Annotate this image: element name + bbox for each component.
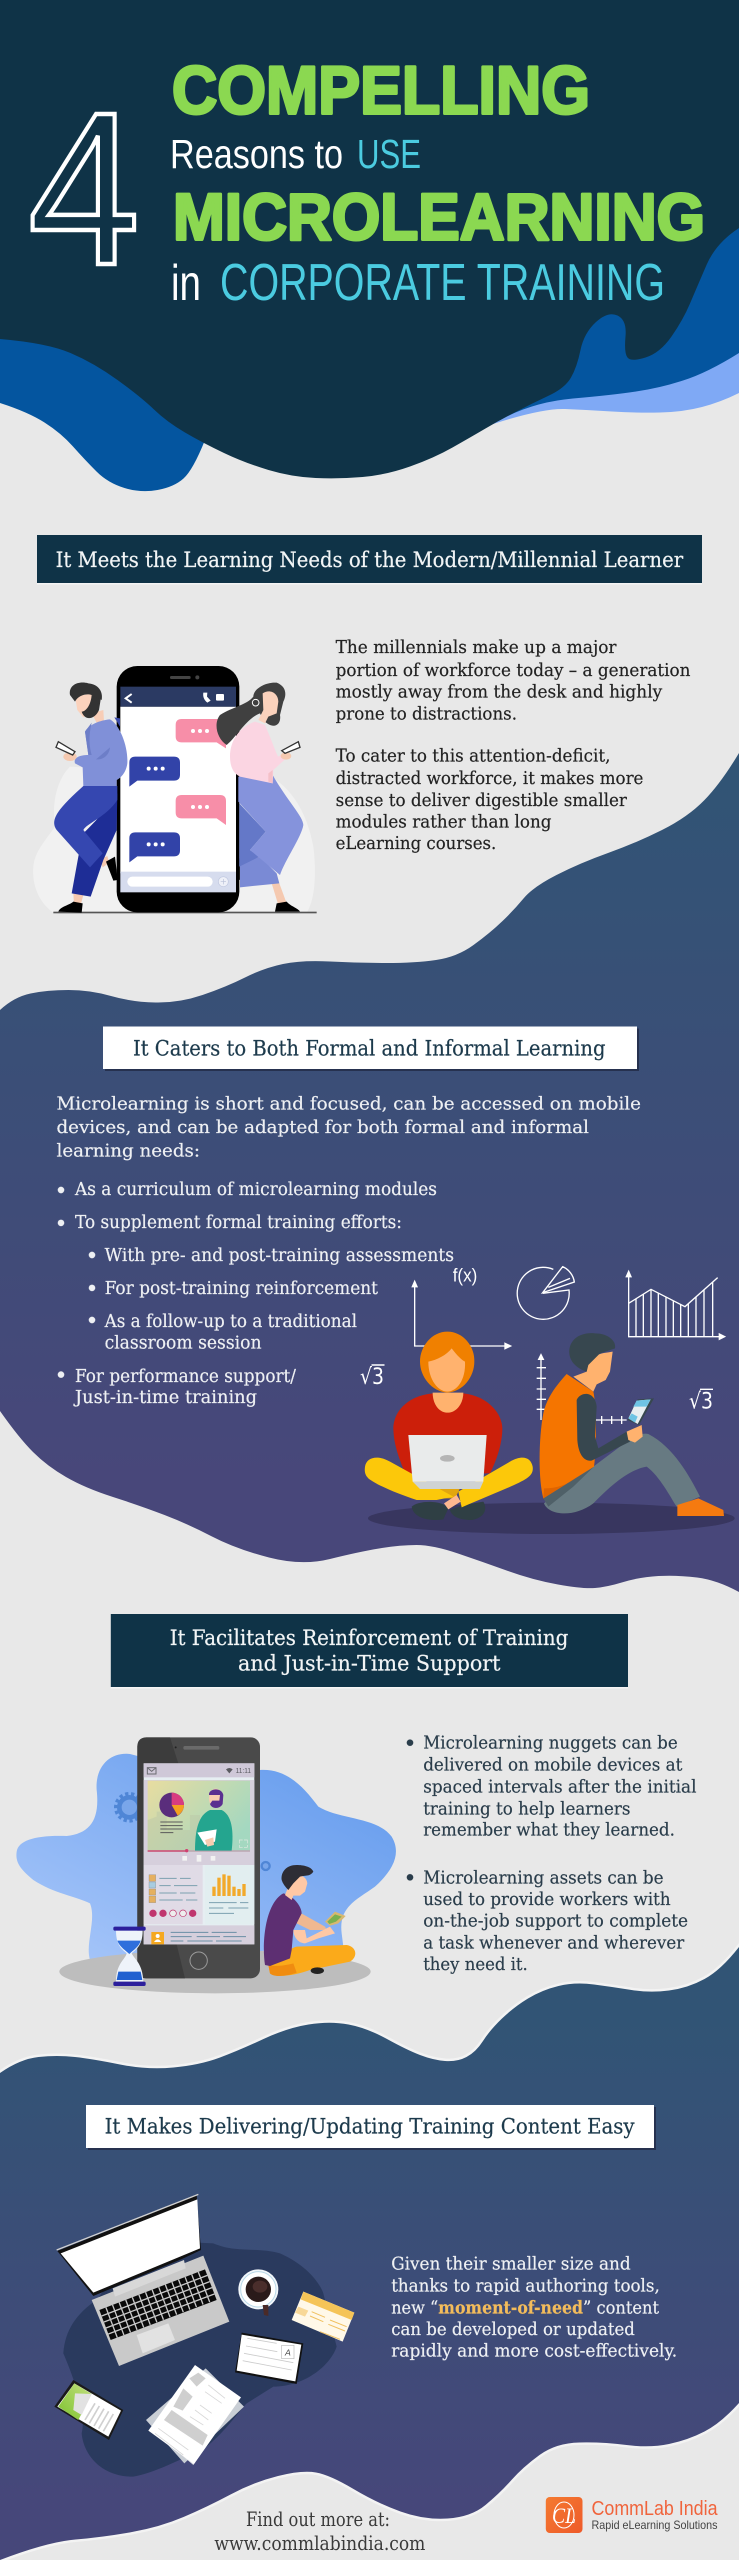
bullet list: reason 3: Microlearning nuggets can be [423, 1732, 678, 1753]
text block: reason 1: distracted workforce, it makes more [336, 768, 643, 789]
title: COMPELLING [172, 52, 590, 128]
card [292, 2292, 354, 2342]
formula label: √3 [360, 1365, 384, 1390]
text block: intro and bullet list: learning needs: [56, 1140, 200, 1161]
bullet list: reason 3: remember what they learned. [423, 1820, 675, 1841]
coffee cup [238, 2269, 278, 2316]
text block: intro and bullet list: As a follow-up to a traditional [104, 1312, 357, 1332]
text block: reason 1 [336, 637, 691, 854]
text block: intro and bullet list [56, 1093, 641, 1408]
panel: reason 4 [54, 2105, 677, 2477]
seated learner [264, 1865, 355, 1976]
text block: reason 4: can be developed or updated [391, 2319, 635, 2340]
text block: intro and bullet list: Microlearning is short and focused, can be accessed on mobile [56, 1093, 641, 1114]
formula label: √3 [689, 1389, 713, 1414]
text block: reason 1: eLearning courses. [336, 833, 496, 854]
panel background: reason 4 [0, 1947, 739, 2560]
illustration: two people leaning on a phone [33, 666, 317, 913]
formula label [360, 1266, 713, 1414]
header banner [0, 0, 739, 491]
phone device [137, 1737, 260, 1978]
paper stack [146, 2365, 244, 2465]
heading: reason 4 [86, 2105, 656, 2150]
heading: reason 2: It Caters to Both Formal and Informal Learning [133, 1037, 606, 1061]
title: MICROLEARNING [173, 180, 705, 254]
text block: intro and bullet list: Just-in-time training [73, 1388, 257, 1408]
title: in [171, 255, 201, 311]
phone device: 11:11 [236, 1766, 251, 1775]
panel background: reason 2 [0, 753, 739, 1592]
bullet list: reason 3 [407, 1732, 697, 1975]
heading: reason 3: and Just-in-Time Support [238, 1652, 501, 1676]
note tablet: A [284, 2347, 291, 2357]
text block: intro and bullet list: As a curriculum of microlearning modules [74, 1180, 437, 1200]
man reading a tablet [540, 1333, 724, 1516]
illustration: video lesson on phone [16, 1737, 396, 1993]
footer call to action [214, 2507, 425, 2555]
text block: reason 1: mostly away from the desk and highly [336, 682, 663, 703]
bullet list: reason 3: a task whenever and wherever [423, 1932, 685, 1953]
logo: CommLab India: CL [552, 2503, 576, 2528]
bullet list: reason 3: they need it. [423, 1954, 528, 1975]
text block: reason 4: ” content [583, 2297, 660, 2318]
illustration: desk with laptop and papers [54, 2194, 354, 2477]
note tablet [235, 2333, 303, 2384]
text block: reason 1: modules rather than long [336, 812, 552, 833]
text block: reason 1: sense to deliver digestible smaller [336, 790, 627, 811]
bullet list: reason 3: delivered on mobile devices at [423, 1755, 683, 1776]
footer call to action: Find out more at: [246, 2507, 390, 2531]
logo: CommLab India: Rapid eLearning Solutions [592, 2518, 718, 2532]
panel: reason 3 [16, 1614, 697, 1993]
panel: reason 1 [33, 535, 702, 913]
formula label: f(x) [453, 1266, 477, 1286]
text block: reason 4: rapidly and more cost-effectively. [391, 2341, 677, 2362]
hourglass [113, 1927, 146, 1986]
text block: reason 1: portion of workforce today – a generation [336, 660, 691, 681]
illustration: learners with maths symbols [365, 1267, 735, 1534]
heading: reason 2 [103, 1026, 639, 1071]
small device [54, 2380, 123, 2440]
bullet list: reason 3: on-the-job support to complete [423, 1911, 688, 1932]
woman with laptop [365, 1332, 533, 1520]
phone [117, 666, 239, 912]
text block: intro and bullet list: devices, and can be adapted for both formal and informal [56, 1117, 589, 1138]
text block: reason 4: thanks to rapid authoring tools, [391, 2276, 660, 2297]
laptop [57, 2194, 229, 2366]
heading: reason 3 [111, 1614, 628, 1688]
title [170, 52, 705, 312]
text block: reason 1: The millennials make up a major [336, 637, 617, 658]
bullet list: reason 3: training to help learners [423, 1798, 630, 1819]
footer call to action: www.commlabindia.com [214, 2531, 425, 2555]
text block: intro and bullet list: classroom session [105, 1334, 261, 1354]
heading: reason 1: It Meets the Learning Needs of the Modern/Millennial Learner [56, 548, 684, 572]
text block: reason 4: moment-of-need [438, 2297, 583, 2318]
title: USE [357, 131, 421, 177]
text block: reason 1: prone to distractions. [336, 703, 517, 724]
text block: intro and bullet list: To supplement formal training efforts: [75, 1213, 402, 1233]
text block: intro and bullet list: With pre- and post-training assessments [105, 1246, 454, 1266]
text block: reason 4: Given their smaller size and [391, 2253, 631, 2274]
woman figure [217, 683, 303, 912]
chart icons [412, 1267, 725, 1424]
text block: reason 4: new “ [391, 2297, 438, 2318]
title numeral 4: 4 [28, 68, 140, 311]
text block: reason 1: To cater to this attention-deficit, [336, 746, 610, 767]
panel: reason 2 [56, 1026, 735, 1534]
text block: reason 4 [391, 2253, 677, 2362]
bullet list: reason 3: used to provide workers with [423, 1889, 671, 1910]
title: Reasons to [170, 131, 343, 177]
heading: reason 1 [37, 535, 702, 584]
bullet list: reason 3: spaced intervals after the initial [423, 1776, 697, 1797]
heading: reason 4: It Makes Delivering/Updating Training Content Easy [105, 2114, 635, 2138]
man figure [54, 683, 127, 913]
logo: CommLab India: CommLab India [592, 2498, 718, 2520]
bullet list: reason 3: Microlearning assets can be [423, 1867, 664, 1888]
heading: reason 3: It Facilitates Reinforcement of Training [170, 1626, 568, 1650]
text block: intro and bullet list: For performance support/ [75, 1367, 296, 1387]
text block: intro and bullet list: For post-training reinforcement [105, 1279, 378, 1299]
logo: CommLab India [546, 2497, 718, 2533]
